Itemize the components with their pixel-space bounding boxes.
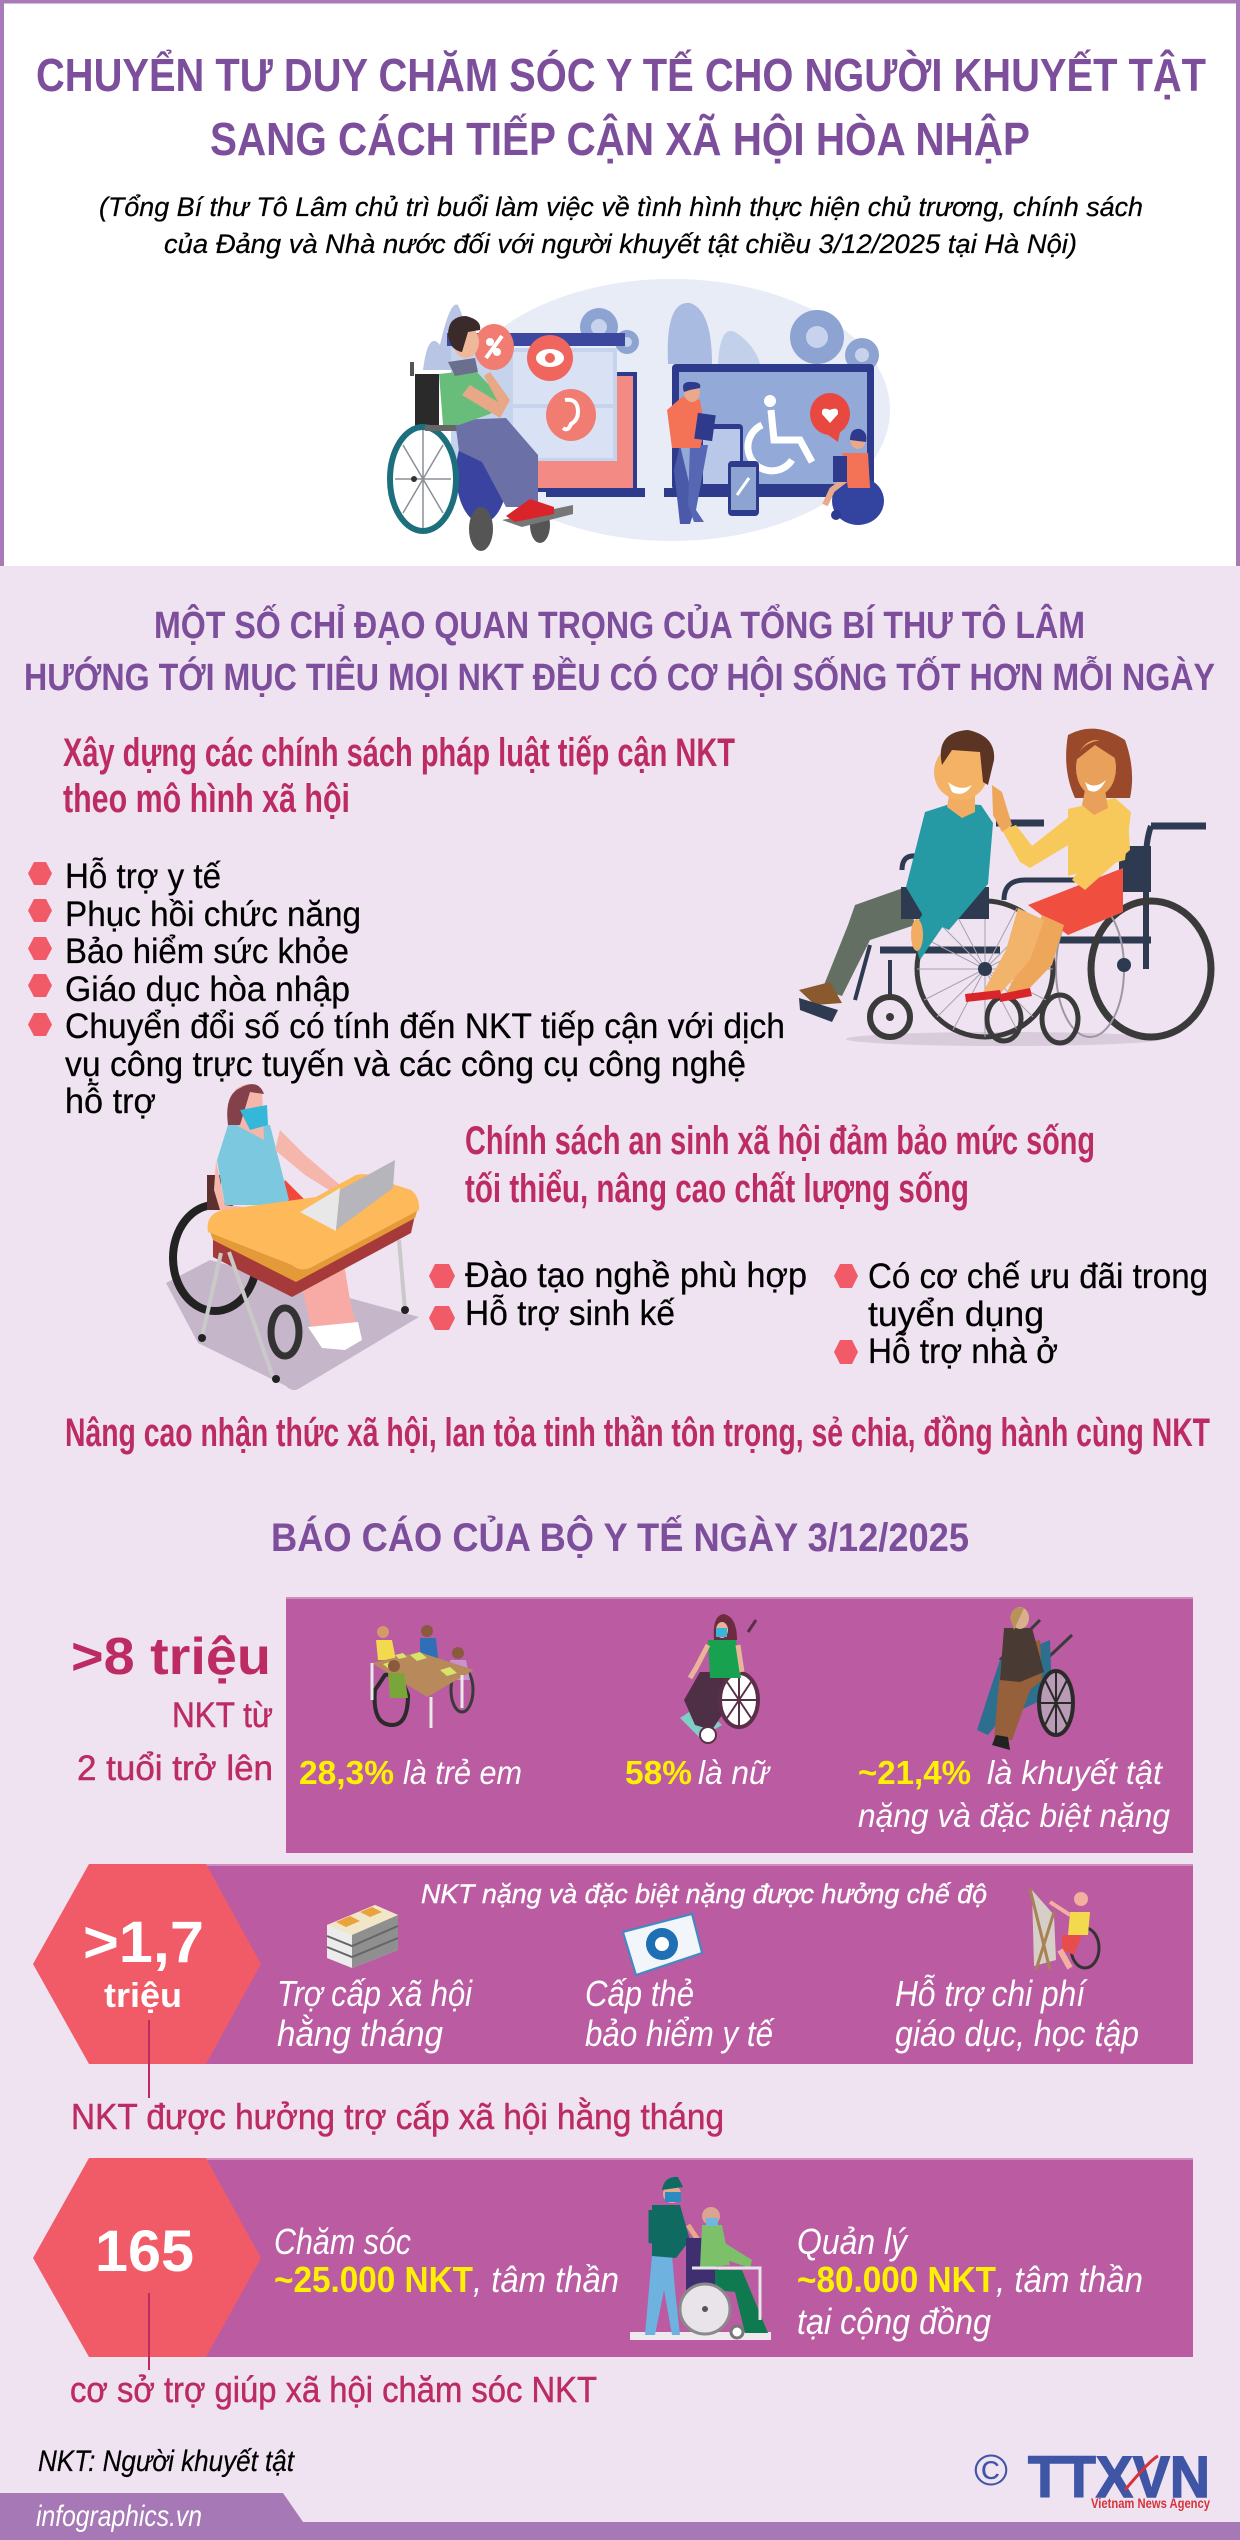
panel: demographics: 58% xyxy=(625,1754,692,1791)
panel: demographics: nặng và đặc biệt nặng xyxy=(858,1797,1171,1834)
stat: over 8 million: >8 triệu xyxy=(71,1628,271,1686)
directive 2 bullets: Hỗ trợ nhà ở xyxy=(868,1332,1058,1371)
stat: over 8 million: NKT từ xyxy=(172,1696,273,1735)
panel: demographics: ~21,4% xyxy=(858,1754,971,1791)
tablet and phone xyxy=(700,424,759,516)
directive 2 heading xyxy=(465,1119,1095,1211)
icon: insurance card xyxy=(623,1914,702,1975)
man xyxy=(799,730,994,1022)
seated person xyxy=(825,429,884,525)
panel: care facilities xyxy=(33,2158,1193,2357)
icon: children at table xyxy=(372,1625,474,1728)
benefit labels: Hỗ trợ chi phí xyxy=(895,1973,1088,2014)
icon: artist in wheelchair xyxy=(1030,1889,1099,1970)
directive 1 bullets: Bảo hiểm sức khỏe xyxy=(65,932,349,971)
subtitle: của Đảng và Nhà nước đối với người khuyết tật chiều 3/12/2025 tại Hà Nội) xyxy=(164,229,1077,259)
directive 1 heading xyxy=(63,731,735,821)
illustration: accessible technology xyxy=(390,279,890,551)
title: SANG CÁCH TIẾP CẬN XÃ HỘI HÒA NHẬP xyxy=(210,113,1030,165)
benefit labels: giáo dục, học tập xyxy=(895,2013,1139,2054)
directive 2 bullets: tuyển dụng xyxy=(868,1295,1044,1334)
benefit labels: bảo hiểm y tế xyxy=(585,2013,776,2054)
directive 1 bullets: Hỗ trợ y tế xyxy=(65,857,221,896)
woman xyxy=(965,729,1132,1002)
benefit labels: hằng tháng xyxy=(277,2013,443,2054)
icon: caregiver and patient xyxy=(630,2177,771,2340)
management figure xyxy=(797,2221,1143,2342)
section heading xyxy=(24,602,1215,699)
directive 2 bullets: Có cơ chế ưu đãi trong xyxy=(868,1257,1208,1296)
directive 1 bullets: Phục hồi chức năng xyxy=(65,895,361,934)
title xyxy=(36,49,1206,165)
panel: demographics xyxy=(286,1597,1193,1853)
illustration: couple in wheelchairs xyxy=(799,729,1211,1046)
stat hexagon: 165 xyxy=(33,2158,261,2357)
icon: muted xyxy=(474,324,514,370)
directive 2 bullets: Đào tạo nghề phù hợp xyxy=(465,1256,807,1295)
care figure: , tâm thần xyxy=(473,2259,619,2300)
standing person xyxy=(667,382,716,524)
subtitle: (Tổng Bí thư Tô Lâm chủ trì buổi làm việc về tình hình thực hiện chủ trương, chính sách xyxy=(99,192,1143,222)
directive 2 bullets: Hỗ trợ sinh kế xyxy=(465,1294,675,1333)
management figure: , tâm thần xyxy=(996,2259,1143,2300)
stat hexagon: 1.7 million: >1,7 xyxy=(83,1910,204,1975)
management figure: ~80.000 NKT xyxy=(797,2259,996,2300)
logo: TTXVN: TTXVN xyxy=(1028,2445,1210,2510)
icon: heart bubble xyxy=(810,393,850,442)
directive 1 bullets: hỗ trợ xyxy=(65,1082,156,1121)
section heading: MỘT SỐ CHỈ ĐẠO QUAN TRỌNG CỦA TỔNG BÍ THƯ TÔ LÂM xyxy=(154,602,1085,647)
subtitle xyxy=(99,192,1143,259)
panel: social allowance: NKT nặng và đặc biệt nặng được hưởng chế độ xyxy=(421,1879,987,1909)
management figure: tại cộng đồng xyxy=(797,2301,991,2342)
footer band xyxy=(0,2493,1240,2540)
panel: demographics: là trẻ em xyxy=(403,1754,522,1791)
panel: demographics: là khuyết tật xyxy=(987,1754,1164,1791)
illustration: woman at desk xyxy=(166,1084,419,1390)
icon: man in wheelchair xyxy=(977,1607,1073,1750)
benefit labels: Cấp thẻ xyxy=(585,1973,694,2014)
icon: ear xyxy=(546,389,596,441)
footer band: infographics.vn xyxy=(36,2500,202,2533)
stat hexagon: 1.7 million: triệu xyxy=(104,1977,182,2015)
stat hexagon: 1.7 million xyxy=(33,1864,261,2064)
panel: social allowance xyxy=(33,1864,1193,2064)
logo: TTXVN: Vietnam News Agency xyxy=(1091,2495,1210,2511)
directive 2 heading: tối thiểu, nâng cao chất lượng sống xyxy=(465,1167,969,1211)
header panel xyxy=(0,0,1240,566)
care figure: Chăm sóc xyxy=(274,2221,411,2262)
directive 1 heading: Xây dựng các chính sách pháp luật tiếp cận NKT xyxy=(63,731,735,775)
stat: over 8 million xyxy=(71,1628,273,1788)
footnote: NKT: Người khuyết tật xyxy=(38,2445,295,2478)
icon: woman in wheelchair xyxy=(680,1614,758,1743)
directive 1 bullets: Giáo dục hòa nhập xyxy=(65,970,350,1009)
left screen xyxy=(447,333,645,497)
directive 1 heading: theo mô hình xã hội xyxy=(63,777,350,821)
icon: money stacks xyxy=(327,1905,398,1968)
directive 1 bullets xyxy=(28,857,785,1121)
stat: over 8 million: 2 tuổi trở lên xyxy=(77,1749,273,1788)
panel: demographics: 28,3% xyxy=(299,1754,394,1791)
management figure: Quản lý xyxy=(797,2221,909,2262)
panel: demographics: là nữ xyxy=(698,1754,771,1791)
directive 2 bullets xyxy=(429,1256,1208,1371)
callout: care facilities: cơ sở trợ giúp xã hội chăm sóc NKT xyxy=(70,2369,597,2410)
callout: allowance recipients: NKT được hưởng trợ cấp xã hội hằng tháng xyxy=(71,2096,724,2137)
icon: wheelchair symbol xyxy=(748,395,812,471)
person in wheelchair xyxy=(390,316,573,551)
logo: TTXVN: © xyxy=(974,2446,1008,2495)
stat hexagon: 165: 165 xyxy=(95,2219,194,2284)
care figure: ~25.000 NKT xyxy=(274,2259,473,2300)
benefit labels: Trợ cấp xã hội xyxy=(277,1973,473,2014)
directive 1 bullets: vụ công trực tuyến và các công cụ công nghệ xyxy=(65,1045,746,1084)
benefit labels xyxy=(277,1973,1139,2054)
icon: eye xyxy=(527,335,573,381)
report heading: BÁO CÁO CỦA BỘ Y TẾ NGÀY 3/12/2025 xyxy=(271,1514,969,1560)
right screen xyxy=(664,364,874,497)
care figure xyxy=(274,2221,619,2300)
directive 1 bullets: Chuyển đổi số có tính đến NKT tiếp cận với dịch xyxy=(65,1007,785,1046)
